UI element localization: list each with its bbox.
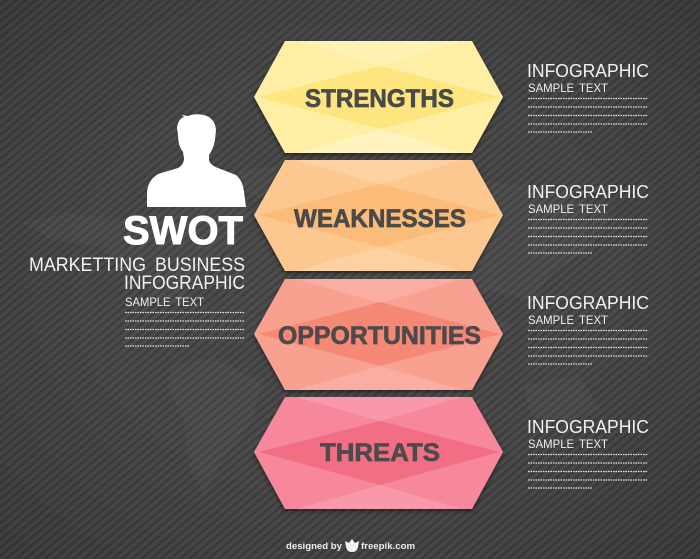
hexagon: weaknesses (254, 160, 503, 271)
text block: opportunities (527, 293, 649, 364)
subtitle: MARKETTING (29, 255, 146, 276)
text block: strengths: INFOGRAPHIC (527, 61, 649, 81)
text block: opportunities: INFOGRAPHIC (527, 293, 649, 313)
icon: person silhouette (147, 114, 246, 207)
text block: weaknesses: INFOGRAPHIC (527, 182, 649, 202)
label: strengths: STRENGTHS (305, 85, 454, 113)
footer credit: designed by (286, 541, 343, 552)
label: threats: THREATS (320, 439, 440, 467)
icon: freepik logo (345, 539, 359, 552)
hexagon: strengths (254, 41, 503, 153)
background world map (22, 165, 610, 495)
label: weaknesses: WEAKNESSES (294, 205, 466, 233)
title: SWOT: SWOT (123, 209, 243, 253)
text block: weaknesses (527, 182, 649, 253)
subtitle (29, 255, 245, 294)
subtitle: BUSINESS (155, 255, 245, 276)
hexagon: threats (254, 397, 503, 509)
footer credit: freepik.com (361, 541, 415, 552)
text block: threats: INFOGRAPHIC (527, 417, 649, 437)
label: opportunities: OPPORTUNITIES (278, 322, 481, 350)
hexagon: opportunities (254, 279, 503, 390)
text block: weaknesses: SAMPLE TEXT (528, 202, 609, 216)
text block: threats: SAMPLE TEXT (528, 437, 609, 451)
text block: strengths (527, 61, 649, 132)
footer credit (286, 539, 415, 552)
text block: threats (527, 417, 649, 488)
subtitle: INFOGRAPHIC (124, 273, 245, 294)
text block: strengths: SAMPLE TEXT (528, 81, 609, 95)
left text block (125, 295, 244, 346)
left text block: SAMPLE TEXT (125, 295, 205, 309)
text block: opportunities: SAMPLE TEXT (528, 313, 609, 327)
